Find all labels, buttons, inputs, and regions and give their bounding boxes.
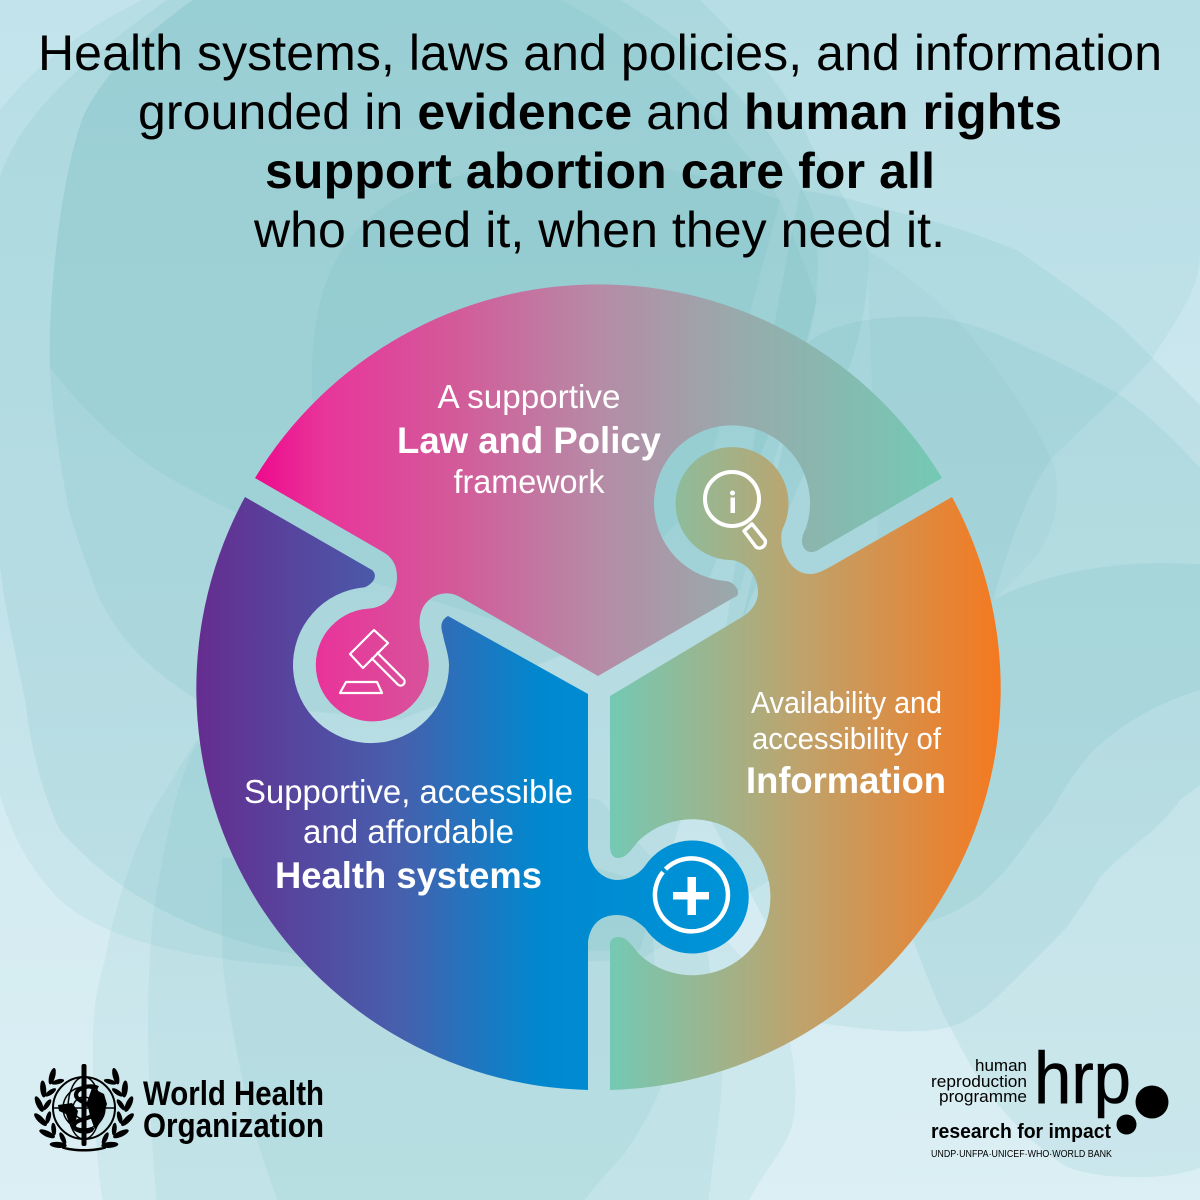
text: health systems (244, 774, 573, 896)
panel: law and policy piece (255, 284, 942, 721)
icon: WHO emblem (32, 1064, 136, 1152)
text: law and policy (397, 378, 661, 500)
icon: gavel (340, 630, 405, 693)
text: health systems: Health systems (275, 855, 542, 896)
text: World Health Organization (143, 1075, 324, 1145)
panel: information piece (610, 447, 1001, 1090)
icon: magnifier with i (705, 472, 765, 548)
text: health systems: and affordable (303, 814, 514, 851)
puzzle circle (196, 284, 1001, 1090)
text: law and policy: Law and Policy (397, 420, 661, 461)
logo: World Health Organization (32, 1064, 324, 1152)
text: information: Availability and (751, 686, 942, 720)
text: sponsors: UNDP·UNFPA·UNICEF·WHO·WORLD BANK (931, 1149, 1112, 1160)
text: programme name: human (975, 1056, 1027, 1075)
text: information: accessibility of (752, 722, 941, 756)
logo: human reproduction programme (931, 1038, 1168, 1160)
title: who need it, when they need it. (253, 202, 945, 258)
text: information (746, 686, 946, 801)
text: programme name (931, 1056, 1027, 1106)
text: programme name: reproduction (931, 1072, 1027, 1091)
icon: medical plus (655, 858, 728, 931)
icon: hrp dots (1116, 1086, 1168, 1134)
text: law and policy: A supportive (438, 378, 620, 415)
title: grounded in evidence and human rights (138, 84, 1062, 140)
text: information: Information (746, 760, 946, 801)
text: law and policy: framework (454, 463, 605, 500)
text: World Health Organization: Organization (143, 1107, 324, 1145)
panel: health systems piece (196, 497, 749, 1090)
text: health systems: Supportive, accessible (244, 774, 573, 811)
text: research for impact: research for impact (931, 1121, 1111, 1143)
title: support abortion care for all (265, 143, 935, 199)
title: Health systems, laws and policies, and information (38, 25, 1162, 81)
text: World Health Organization: World Health (143, 1075, 324, 1113)
title (38, 25, 1162, 258)
text: hrp: hrp (1034, 1038, 1131, 1119)
text: programme name: programme (939, 1087, 1027, 1106)
